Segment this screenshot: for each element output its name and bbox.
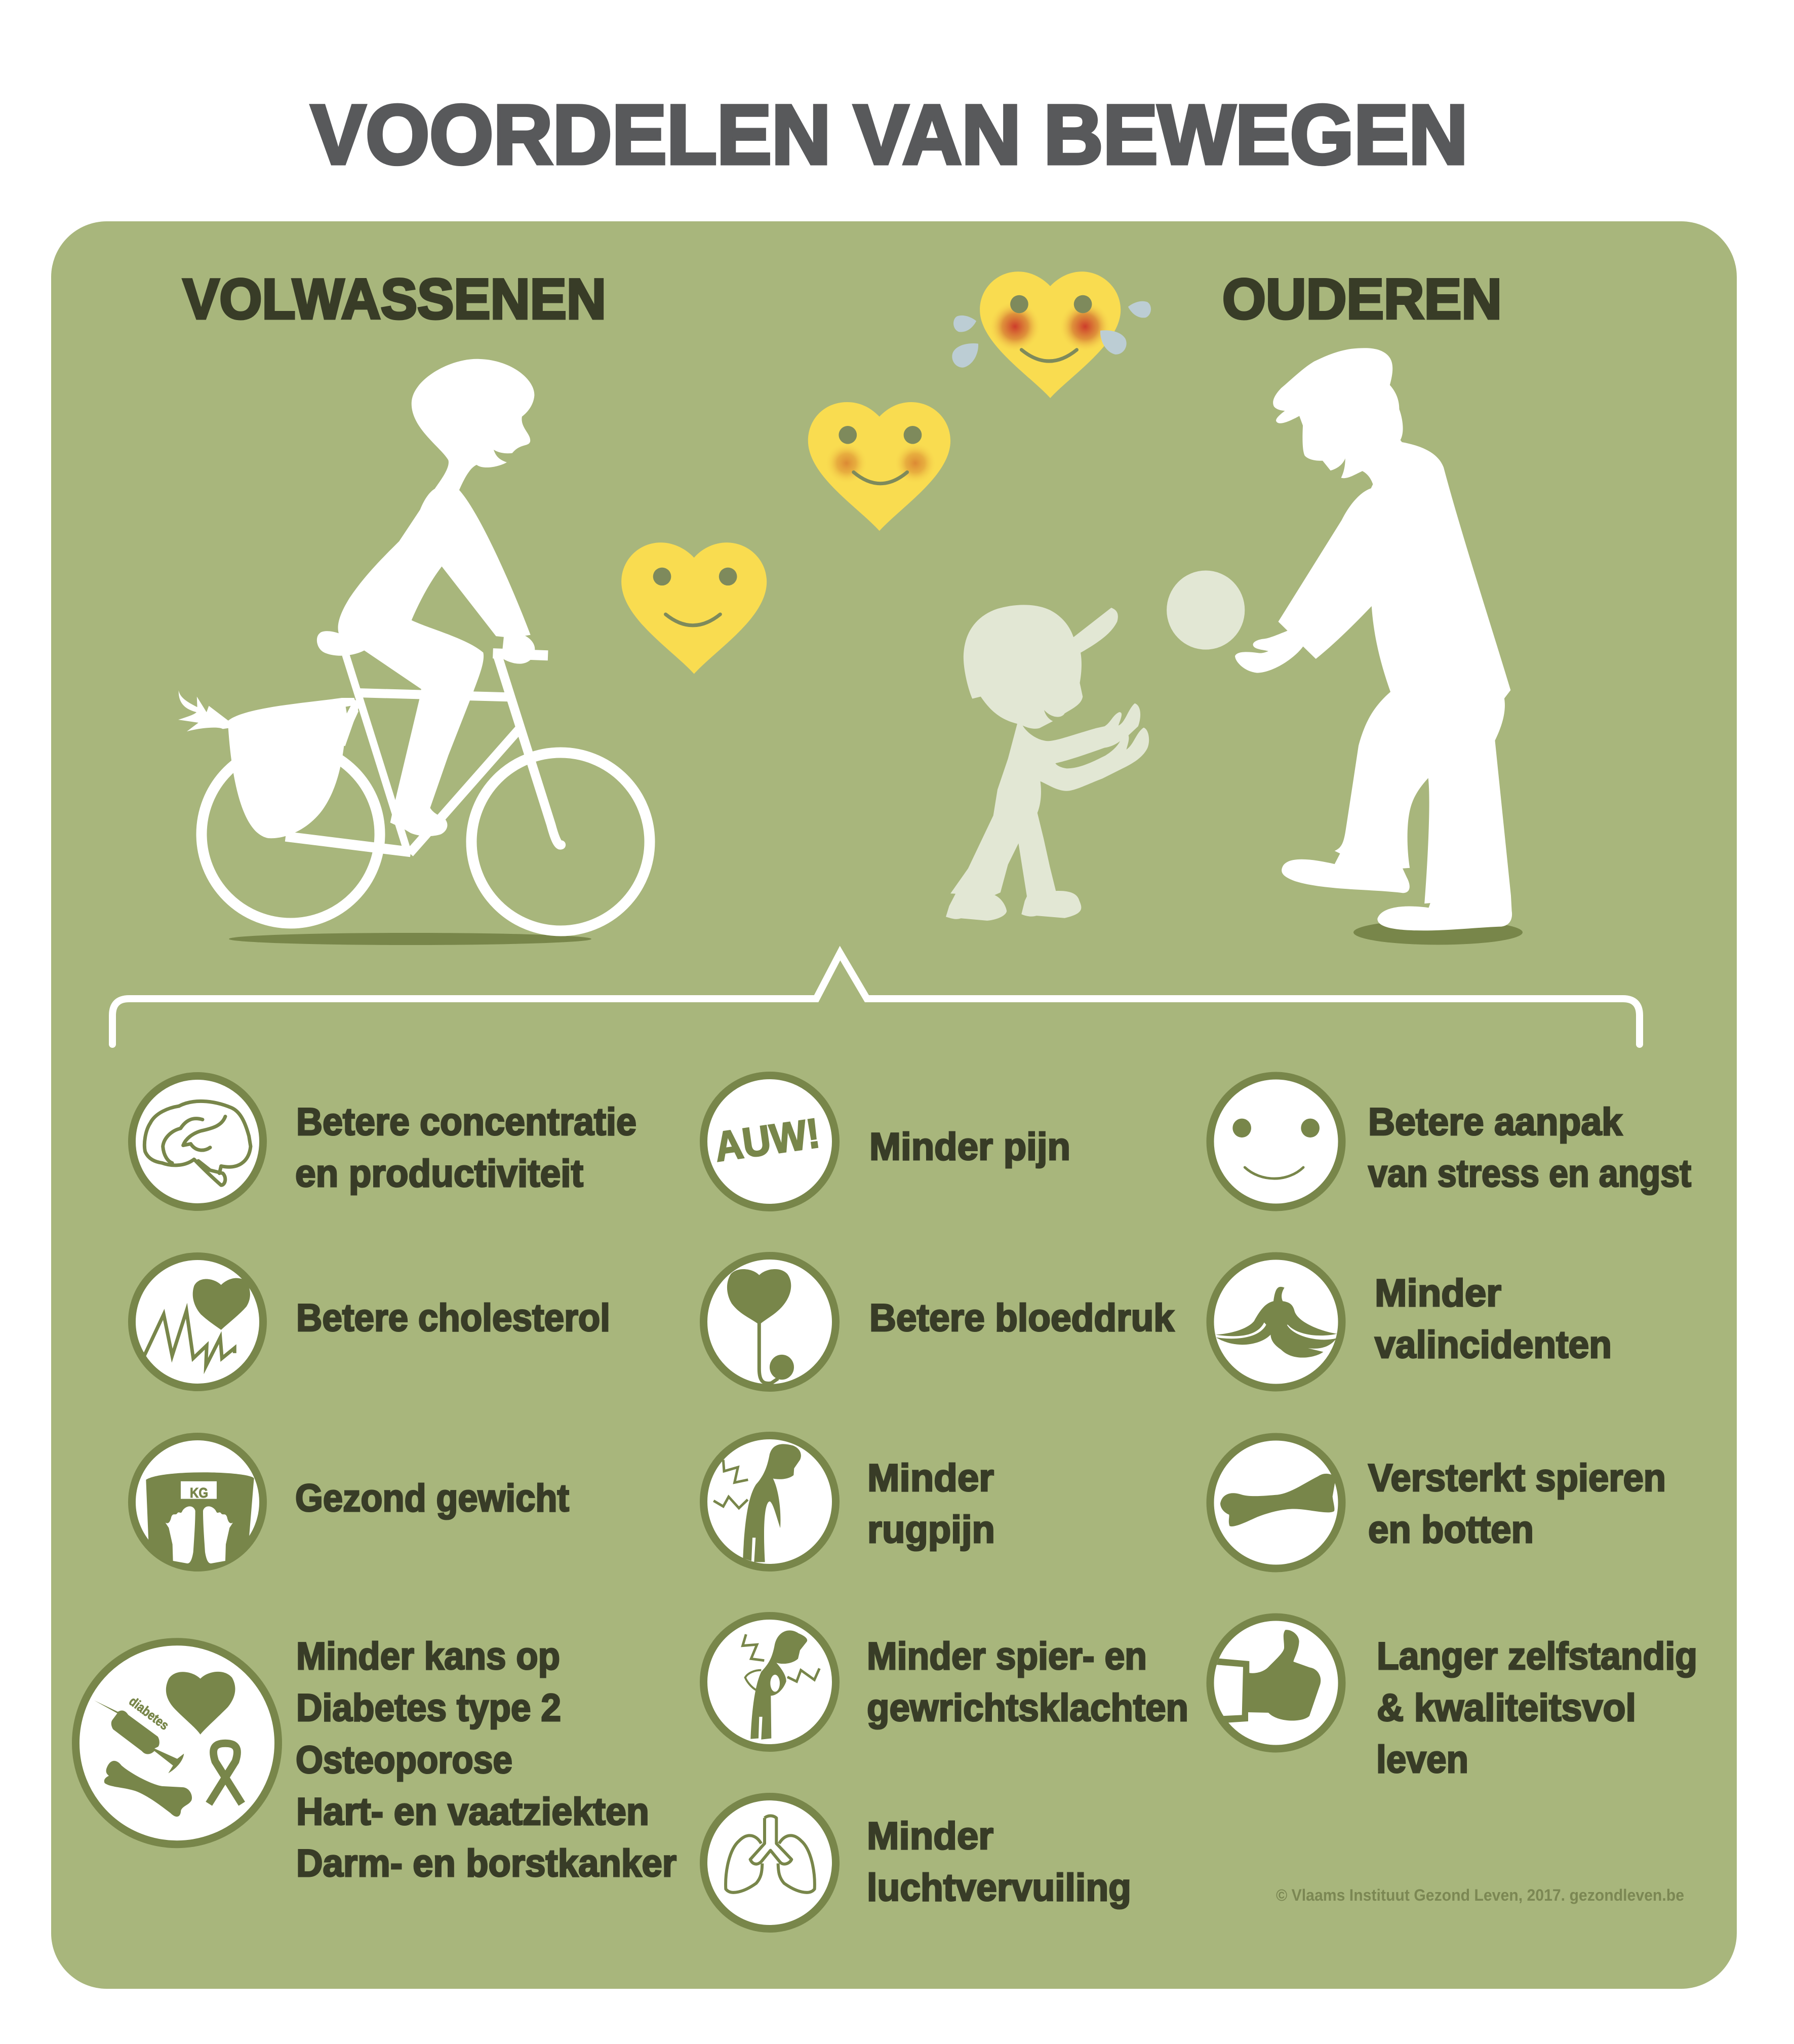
- text: minder kans op list: Hart- en vaatziekten: [296, 1790, 649, 1833]
- bicycle front wheel: [471, 753, 650, 931]
- text: valincidenten: Minder: [1375, 1272, 1501, 1315]
- text: minder kans op list: Diabetes type 2: [296, 1686, 561, 1729]
- benefit: rugpijn: [704, 1435, 995, 1568]
- icon: smiley: [1210, 1076, 1342, 1207]
- icon: diseases: [76, 1642, 278, 1844]
- cyclist ground shadow: [229, 933, 591, 945]
- benefit: luchtvervuiling: [704, 1797, 1131, 1929]
- text: minder kans op list: [296, 1635, 676, 1885]
- heart 3 with tears: [952, 271, 1151, 398]
- text: spieren en botten: [1368, 1457, 1666, 1551]
- icon: weighing scale: [132, 1436, 263, 1568]
- heading: volwassenen: VOLWASSENEN: [183, 267, 606, 331]
- text: cholesterol: Betere cholesterol: [296, 1296, 610, 1340]
- older man ground shadow: [1353, 920, 1523, 945]
- text: valincidenten: [1375, 1272, 1612, 1366]
- older man legs: [1282, 686, 1512, 930]
- illustration: smiling hearts: [621, 271, 1151, 674]
- benefit: stress en angst: [1210, 1076, 1691, 1207]
- older man upper body: [1235, 348, 1510, 714]
- text: spier- en gewrichtsklachten: [867, 1635, 1188, 1729]
- icon: lungs: [704, 1797, 835, 1929]
- child and ball: [946, 571, 1245, 921]
- text: pijn: Minder pijn: [869, 1125, 1070, 1168]
- icon: bone: [1210, 1437, 1342, 1568]
- benefit: concentratie: [132, 1076, 636, 1207]
- text: stress en angst: Betere aanpak: [1368, 1100, 1623, 1144]
- text: stress en angst: [1368, 1100, 1691, 1195]
- benefit: bloeddruk: [704, 1256, 1175, 1388]
- heart 2: [808, 402, 950, 531]
- text: concentratie: [295, 1100, 636, 1195]
- heading: ouderen: OUDEREN: [1222, 267, 1502, 331]
- heart 1: [621, 542, 767, 674]
- illustration: child, ball and older man: [946, 348, 1523, 945]
- icon: AUW: [704, 1076, 835, 1207]
- icon: heart and ecg: [132, 1256, 263, 1388]
- icon: blood pressure heart: [704, 1256, 835, 1388]
- icon: banana peel: [1210, 1256, 1342, 1388]
- credit line: © Vlaams Instituut Gezond Leven, 2017. gezondleven.be: [1276, 1886, 1684, 1904]
- text: minder kans op list: Minder kans op: [296, 1635, 560, 1678]
- text: zelfstandig leven: leven: [1376, 1738, 1468, 1781]
- title: VOORDELEN VAN BEWEGEN: [311, 88, 1468, 182]
- benefit: spieren en botten: [1210, 1437, 1666, 1568]
- text: luchtvervuiling: [867, 1815, 1131, 1909]
- text: rugpijn: [867, 1457, 995, 1551]
- text: zelfstandig leven: Langer zelfstandig: [1377, 1635, 1697, 1678]
- text: stress en angst: van stress en angst: [1368, 1152, 1691, 1195]
- benefit: cholesterol: [132, 1256, 610, 1388]
- text: bloeddruk: Betere bloeddruk: [869, 1296, 1175, 1340]
- text: rugpijn: rugpijn: [867, 1508, 995, 1551]
- text: zelfstandig leven: & kwaliteitsvol: [1377, 1686, 1636, 1729]
- benefit: spier- en gewrichtsklachten: [704, 1616, 1188, 1748]
- illustration: cyclist: [178, 359, 650, 945]
- text: zelfstandig leven: [1376, 1635, 1697, 1781]
- text: gewicht: Gezond gewicht: [295, 1477, 569, 1520]
- icon: weighing scale: KG: [190, 1485, 208, 1501]
- text: rugpijn: Minder: [867, 1457, 994, 1500]
- benefit: minder kans op: [76, 1635, 676, 1885]
- text: luchtvervuiling: luchtvervuiling: [867, 1866, 1131, 1909]
- benefit: valincidenten: [1210, 1256, 1612, 1388]
- text: spier- en gewrichtsklachten: gewrichtsklachten: [867, 1686, 1188, 1729]
- benefit: pijn: [704, 1076, 1070, 1207]
- icon: brain: [132, 1076, 263, 1207]
- text: minder kans op list: Darm- en borstkanker: [296, 1842, 676, 1885]
- benefit: gewicht: [132, 1436, 569, 1568]
- text: concentratie: en productiviteit: [295, 1152, 583, 1195]
- icon: diseases: diabetes: [126, 1694, 172, 1733]
- text: luchtvervuiling: Minder: [867, 1815, 993, 1858]
- bracket: [112, 953, 1640, 1044]
- text: spieren en botten: Versterkt spieren: [1368, 1457, 1666, 1500]
- text: spier- en gewrichtsklachten: Minder spier- en: [867, 1635, 1147, 1678]
- benefit: zelfstandig leven: [1210, 1617, 1697, 1781]
- bicycle frame, rider and bag: [178, 359, 561, 853]
- text: spieren en botten: en botten: [1368, 1508, 1534, 1551]
- icon: person with back pain: [704, 1435, 835, 1568]
- text: valincidenten: valincidenten: [1375, 1323, 1612, 1366]
- icon: person with joint pain: [704, 1616, 835, 1748]
- text: concentratie: Betere concentratie: [296, 1100, 636, 1144]
- text: minder kans op list: Osteoporose: [296, 1739, 512, 1782]
- bicycle rear wheel: [202, 745, 380, 923]
- icon: thumbs up: [1210, 1617, 1342, 1749]
- icon: AUW: AUW!: [712, 1110, 823, 1170]
